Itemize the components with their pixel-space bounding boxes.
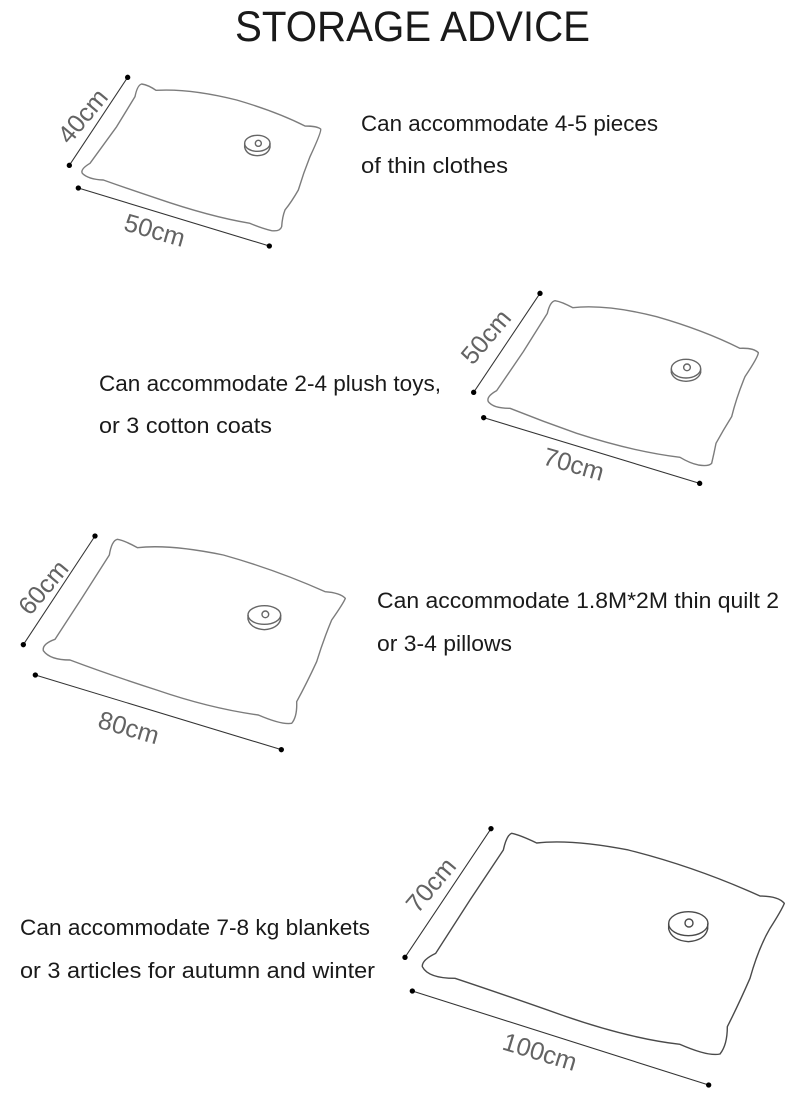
text block: thin clothes: of thin clothes	[361, 153, 508, 178]
text block: quilt and pillows	[377, 588, 779, 656]
text block: plush toys: Can accommodate 2-4 plush toys,	[99, 371, 441, 396]
width dimension line	[33, 672, 284, 752]
text block: plush toys: or 3 cotton coats	[99, 413, 272, 438]
label: 100cm: 100cm	[499, 1028, 580, 1077]
height dimension line	[471, 291, 543, 395]
bag outline	[488, 301, 758, 466]
width dimension line	[410, 988, 711, 1088]
height dimension line	[402, 826, 494, 960]
icon: valve	[245, 135, 270, 156]
text block: blankets and articles: Can accommodate 7-8 kg blankets	[20, 915, 370, 940]
bag outline	[82, 84, 321, 231]
panel: 50x70cm bag diagram	[456, 291, 758, 487]
panel: 40x50cm bag diagram	[52, 75, 321, 253]
label: 50cm: 50cm	[456, 304, 517, 370]
title: STORAGE ADVICE	[235, 3, 590, 51]
height dimension line	[21, 533, 98, 647]
text block: plush toys	[99, 371, 441, 438]
icon: valve	[248, 606, 281, 630]
width dimension line	[76, 185, 272, 249]
label: 70cm: 70cm	[540, 443, 607, 487]
icon: valve	[671, 359, 701, 381]
label: 80cm: 80cm	[95, 706, 162, 750]
width dimension line	[481, 415, 702, 486]
panel: 60x80cm bag diagram	[13, 533, 345, 752]
label: 60cm: 60cm	[13, 555, 74, 621]
label: 40cm: 40cm	[52, 84, 114, 149]
text block: thin clothes: Can accommodate 4-5 pieces	[361, 111, 658, 136]
label: 50cm: 50cm	[121, 209, 188, 253]
label: 70cm: 70cm	[401, 853, 462, 918]
text block: quilt and pillows: Can accommodate 1.8M*2M thin quilt 2	[377, 588, 779, 613]
text block: blankets and articles: or 3 articles for autumn and winter	[20, 958, 375, 983]
bag outline	[422, 833, 784, 1054]
text block: thin clothes	[361, 111, 658, 178]
text block: blankets and articles	[20, 915, 375, 983]
text block: quilt and pillows: or 3-4 pillows	[377, 631, 512, 656]
panel: 70x100cm bag diagram	[401, 826, 784, 1088]
bag outline	[43, 539, 345, 724]
icon: valve	[669, 912, 708, 942]
height dimension line	[67, 75, 130, 168]
